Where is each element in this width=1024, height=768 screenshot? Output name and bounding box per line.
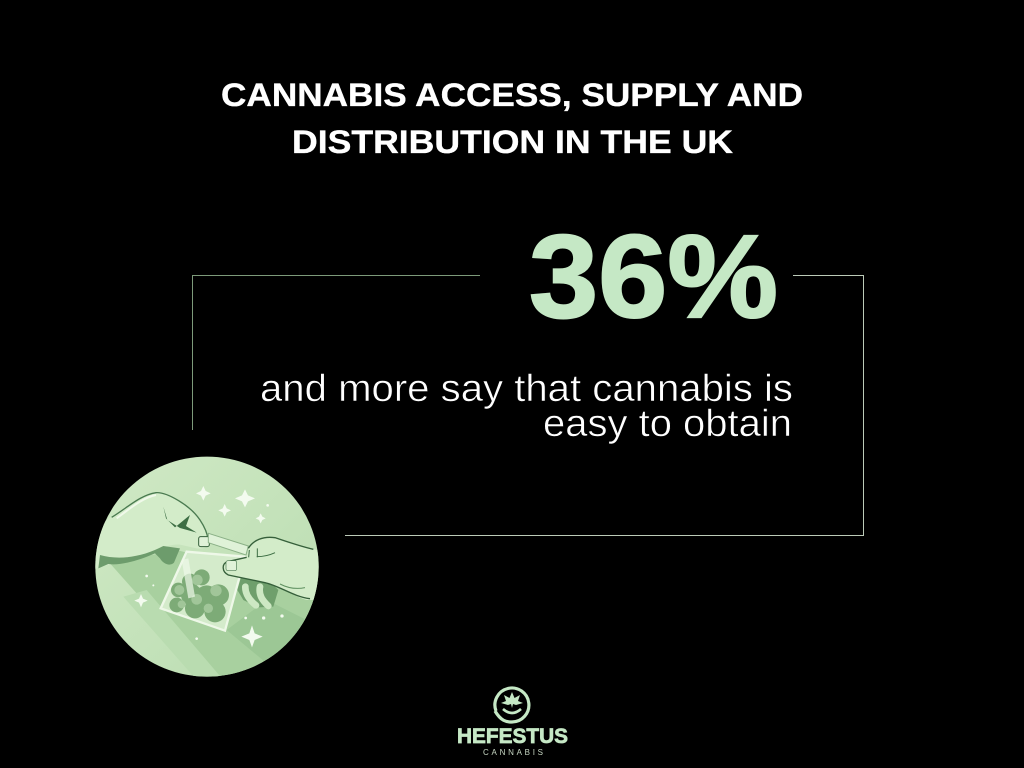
bud (169, 569, 229, 622)
right hand lower fingers (237, 575, 278, 607)
description text (260, 368, 793, 445)
big statistic: 36% (529, 211, 778, 343)
bag seal strip (208, 533, 248, 555)
logo leaf (501, 692, 523, 708)
logo emblem (495, 688, 529, 722)
bag glare (182, 558, 195, 598)
description text: easy to obtain (543, 403, 792, 445)
icon: hands exchanging a bag of cannabis (93, 457, 322, 680)
shadow bands (110, 550, 320, 680)
right hand (238, 538, 319, 600)
title: DISTRIBUTION IN THE UK (292, 124, 733, 160)
title (221, 77, 803, 160)
left hand (93, 493, 208, 569)
description text: and more say that cannabis is (260, 368, 793, 410)
panel frame (192, 276, 864, 536)
bag (161, 552, 245, 631)
sparkles (134, 486, 284, 647)
logo wordmark: HEFESTUS (457, 725, 568, 748)
logo subtitle: CANNABIS (483, 748, 543, 757)
logo: Hefestus Cannabis (457, 688, 568, 757)
title: CANNABIS ACCESS, SUPPLY AND (221, 77, 803, 113)
